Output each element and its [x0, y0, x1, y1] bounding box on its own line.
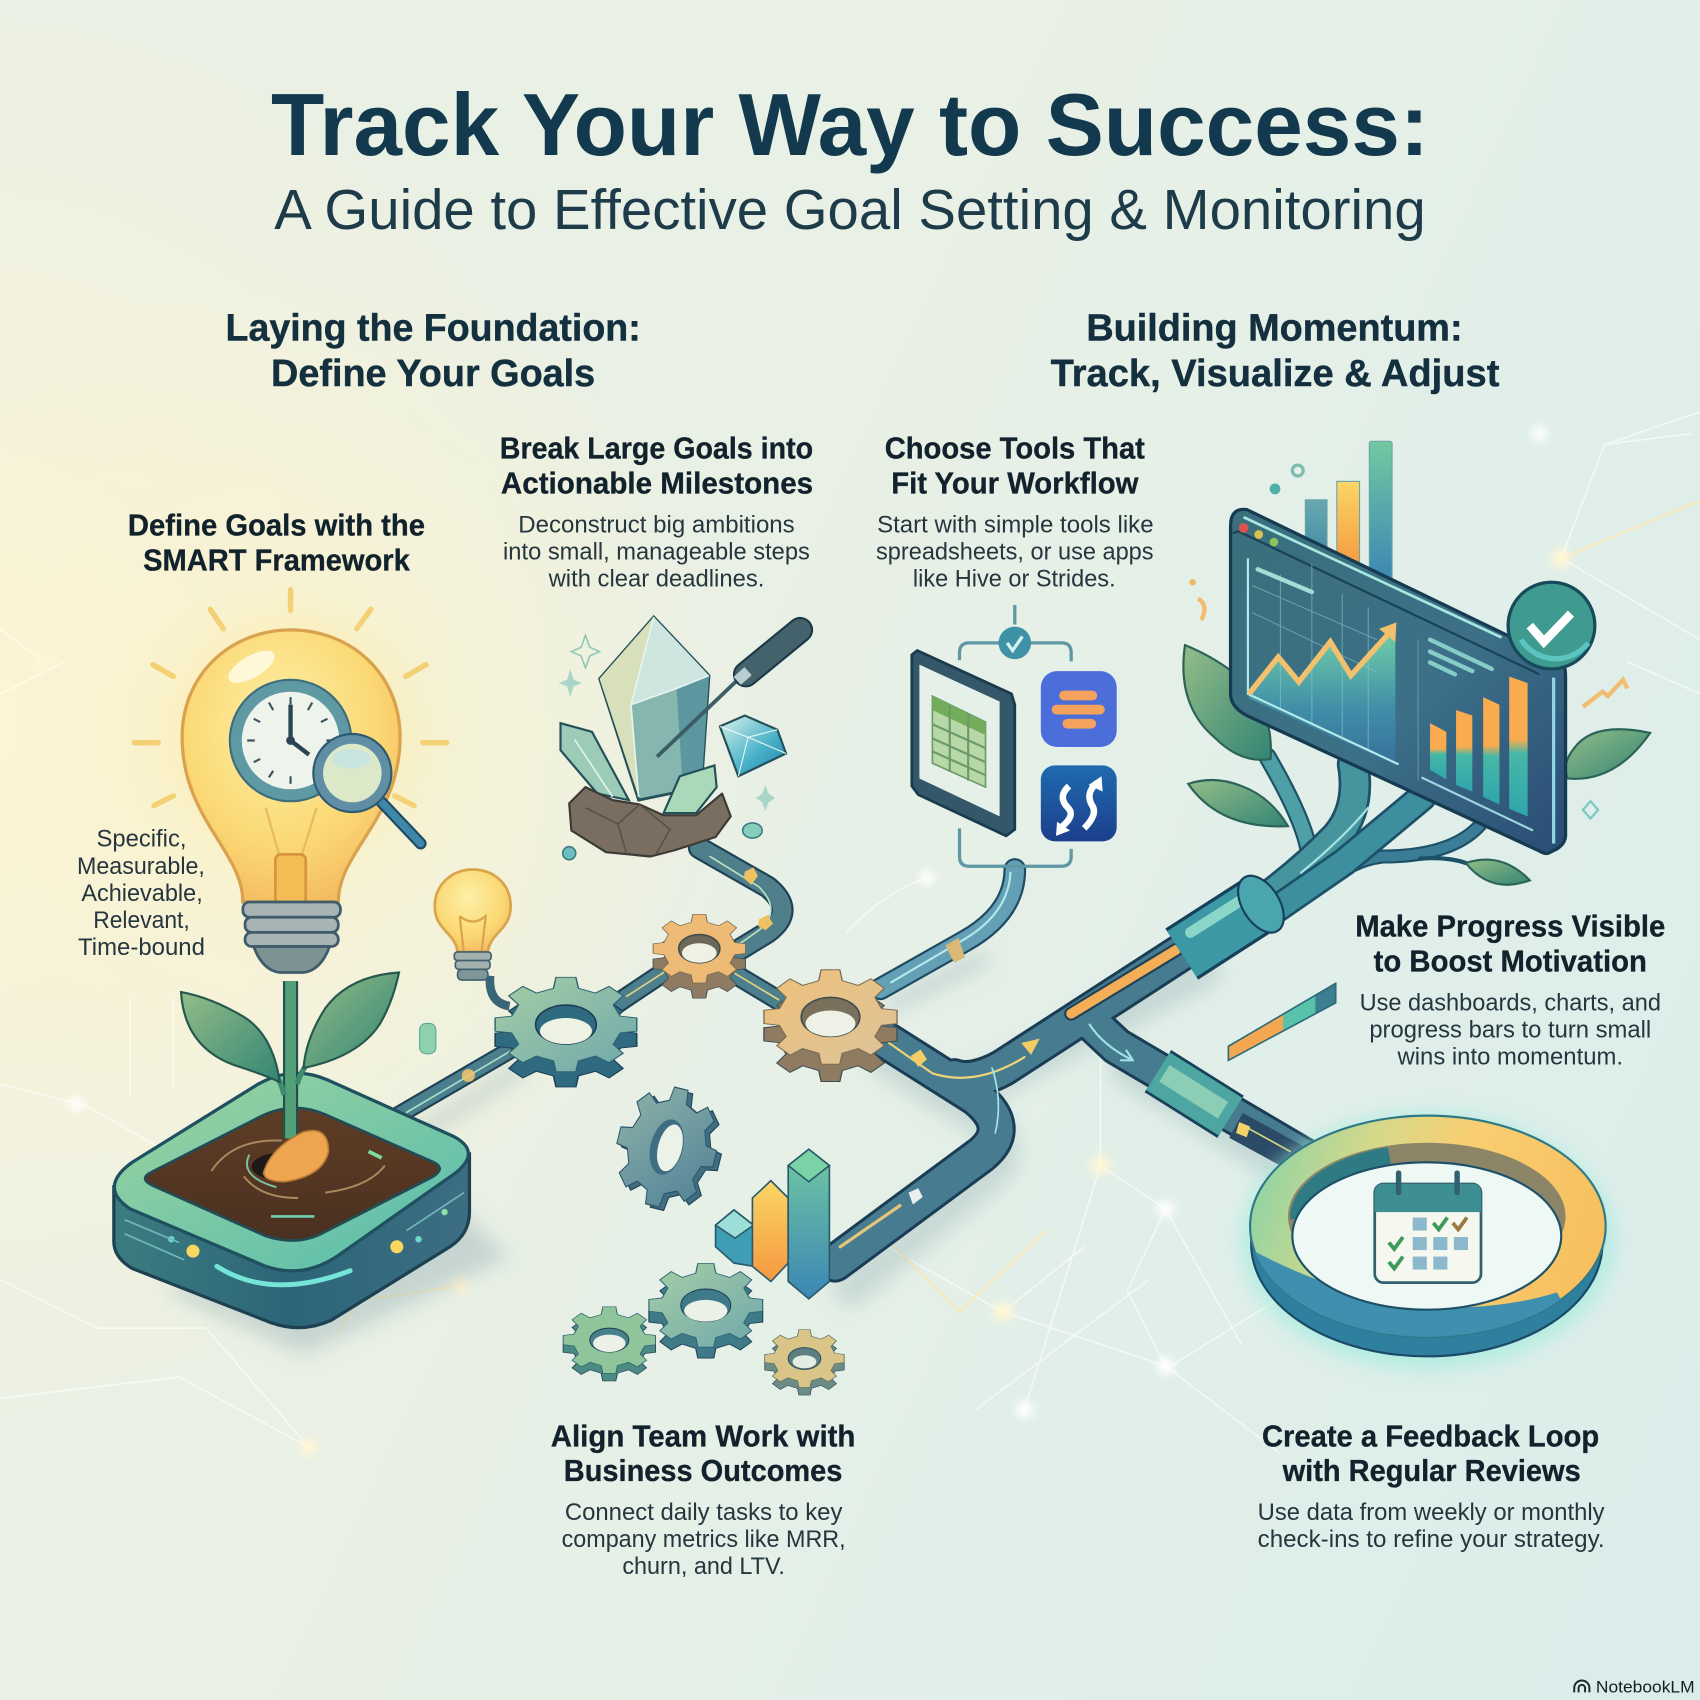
ring blue section [1254, 1251, 1561, 1337]
gear: lower center [649, 1263, 763, 1358]
pipe: crystal to gears [699, 848, 782, 956]
text: Align Team Work [551, 1420, 855, 1580]
text: Choose Tools [876, 433, 1154, 593]
text: Make Progress Visible: Make Progress Visible [1355, 911, 1665, 944]
ring side [1251, 1131, 1602, 1356]
text: Define Goals with the SMART Framework: SMART Framework [143, 544, 410, 577]
text: Create a Feedback Loop: Create a Feedback Loop [1262, 1420, 1599, 1453]
soil swirls [211, 1140, 385, 1216]
left crystal [561, 723, 629, 800]
tools illustration [912, 605, 1117, 866]
text: SMART list: Time-bound [78, 934, 205, 961]
section heading: Laying the Foundation [226, 307, 641, 395]
plant stem [284, 981, 298, 1138]
seed [263, 1131, 329, 1182]
bar chart [1418, 640, 1554, 843]
pipe: second gear to third gear [729, 970, 783, 1003]
pipe: main junction with three branches [835, 949, 1306, 1263]
gear: second tan [653, 914, 745, 998]
section heading: Laying the Foundation: Laying the Foundation: [226, 307, 641, 349]
small bulb [435, 870, 511, 1006]
leaf lower left [1188, 780, 1288, 826]
window dots [1239, 523, 1278, 546]
title: Track Your Way to Success: [271, 76, 1429, 174]
text: SMART list: Measurable, [77, 853, 205, 880]
text: Make Progress Visible: to Boost Motivation [1374, 945, 1647, 978]
soil [145, 1108, 440, 1240]
bars behind dashboard [1305, 441, 1392, 582]
clock [230, 680, 351, 801]
sparkles [558, 635, 775, 811]
tree trunk and branches [1267, 757, 1481, 913]
gear: lower right [765, 1330, 844, 1395]
text: Break Large Goals: with clear deadlines. [548, 566, 764, 593]
connector brackets [960, 605, 1071, 866]
bulb glass [182, 630, 400, 902]
Strides app icon [1041, 765, 1117, 841]
chisel [657, 630, 800, 757]
hole [252, 1152, 317, 1181]
text: SMART list: Specific, [96, 826, 186, 853]
monitor panel [1231, 509, 1566, 854]
text: SMART list [77, 826, 205, 961]
line chart [1248, 558, 1399, 765]
bulb glow [171, 618, 410, 857]
rock [569, 787, 731, 857]
highlight [224, 644, 279, 689]
leaf bottom right [1466, 860, 1530, 885]
floating shapes [1189, 465, 1627, 819]
pebbles [563, 823, 762, 860]
decorative golden light streaks [336, 501, 1700, 1334]
section heading: Building Momentum: Building Momentum: [1086, 307, 1463, 349]
pipe coupling lower [1158, 1071, 1231, 1117]
filament [266, 808, 317, 857]
gear: lower left [563, 1307, 655, 1381]
NotebookLM mark: NotebookLM [1596, 1678, 1695, 1696]
ring glow [1241, 1113, 1614, 1369]
text: Define Goals with the SMART Framework: Define Goals with the [128, 510, 425, 543]
text: Choose Tools: Fit Your Workflow [891, 467, 1139, 500]
pot shadow [163, 1203, 510, 1355]
text: SMART list: Relevant, [93, 907, 190, 934]
main crystal [600, 617, 709, 800]
pipe: first gear to second gear [618, 970, 667, 1003]
section heading: Building Momentum [1051, 307, 1500, 395]
Hive app icon [1041, 671, 1117, 747]
text: Make Progress Visible: Use dashboards, charts, and [1360, 989, 1661, 1016]
check badge [1508, 582, 1595, 669]
section heading: Building Momentum: Track, Visualize & Adjust [1051, 353, 1500, 395]
text: Make Progress Visible: wins into momentum. [1397, 1044, 1623, 1071]
text: Create a Feedback Loop: Use data from weekly or monthly [1258, 1499, 1605, 1526]
text: Break Large Goals [500, 433, 813, 593]
bulb rays [134, 590, 447, 806]
pot with plant and bulb [114, 590, 510, 1355]
text: Create a Feedback Loop: with Regular Reviews [1282, 1455, 1581, 1488]
section heading: Laying the Foundation: Define Your Goals [271, 353, 595, 395]
leaf right [304, 973, 399, 1068]
gem [720, 716, 786, 776]
pipes network [396, 848, 1306, 1288]
screw base [243, 902, 340, 973]
monitor title bar [1233, 531, 1540, 674]
pot body [114, 1155, 469, 1328]
leaf upper left [1183, 645, 1271, 760]
text: Break Large Goals: Break Large Goals into [500, 433, 813, 466]
pipe shadows [412, 960, 1301, 1288]
pipe: gear to tools [880, 870, 1015, 989]
progress bar fragment [1228, 983, 1336, 1060]
review loop [1241, 1113, 1615, 1399]
text: Align Team Work: Business Outcomes [564, 1455, 842, 1488]
crystal illustration [558, 617, 800, 860]
text: Choose Tools: Start with simple tools like [877, 511, 1154, 538]
text: Break Large Goals: into small, manageable steps [503, 538, 810, 565]
3D bar chart [716, 1149, 829, 1299]
right crystal [664, 765, 717, 813]
gear: tilted slate [604, 1077, 734, 1221]
pot rim [114, 1073, 468, 1271]
text: Break Large Goals: Actionable Milestones [501, 467, 813, 500]
tablet [912, 651, 1015, 836]
leaf right [1566, 729, 1650, 779]
gear: first green [495, 977, 637, 1087]
text: Choose Tools: spreadsheets, or use apps [876, 538, 1154, 565]
ring opening [1292, 1162, 1561, 1310]
text: Choose Tools: Choose Tools That [885, 433, 1145, 466]
check node [999, 627, 1031, 659]
text: Choose Tools: like Hive or Strides. [913, 566, 1116, 593]
text: Align Team Work: Align Team Work with [551, 1420, 855, 1453]
text: Align Team Work: Connect daily tasks to key [565, 1499, 842, 1526]
pot lights [125, 1193, 464, 1285]
text: Define Goals with the SMART Framework [128, 510, 425, 577]
decorative network lines [0, 412, 1700, 1453]
text: Break Large Goals: Deconstruct big ambitions [518, 511, 795, 538]
text: Align Team Work: company metrics like MRR, [562, 1526, 846, 1553]
plant branches [260, 1046, 321, 1095]
text: Align Team Work: churn, and LTV. [622, 1553, 785, 1580]
small green capsule [420, 1023, 436, 1054]
magnifier [313, 734, 421, 843]
dashboard illustration [1189, 441, 1627, 854]
ring inner wall [1288, 1143, 1566, 1290]
text: Create a Feedback Loop: check-ins to refine your strategy. [1258, 1526, 1605, 1553]
tree coupling [1182, 868, 1293, 954]
leaf left [181, 992, 280, 1082]
pipe: pot to first gear [396, 1047, 515, 1117]
title: A Guide to Effective Goal Setting & Monitoring [274, 178, 1426, 241]
text: Create a Feedback Loop [1258, 1420, 1605, 1553]
calendar [1375, 1173, 1481, 1283]
text: SMART list: Achievable, [81, 880, 203, 907]
title [271, 76, 1429, 241]
text: Make Progress Visible [1355, 911, 1665, 1071]
ring top [1250, 1116, 1606, 1337]
decorative glowing nodes [35, 426, 1571, 1456]
gear: third tan [764, 970, 897, 1082]
text: Make Progress Visible: progress bars to turn small [1369, 1017, 1651, 1044]
